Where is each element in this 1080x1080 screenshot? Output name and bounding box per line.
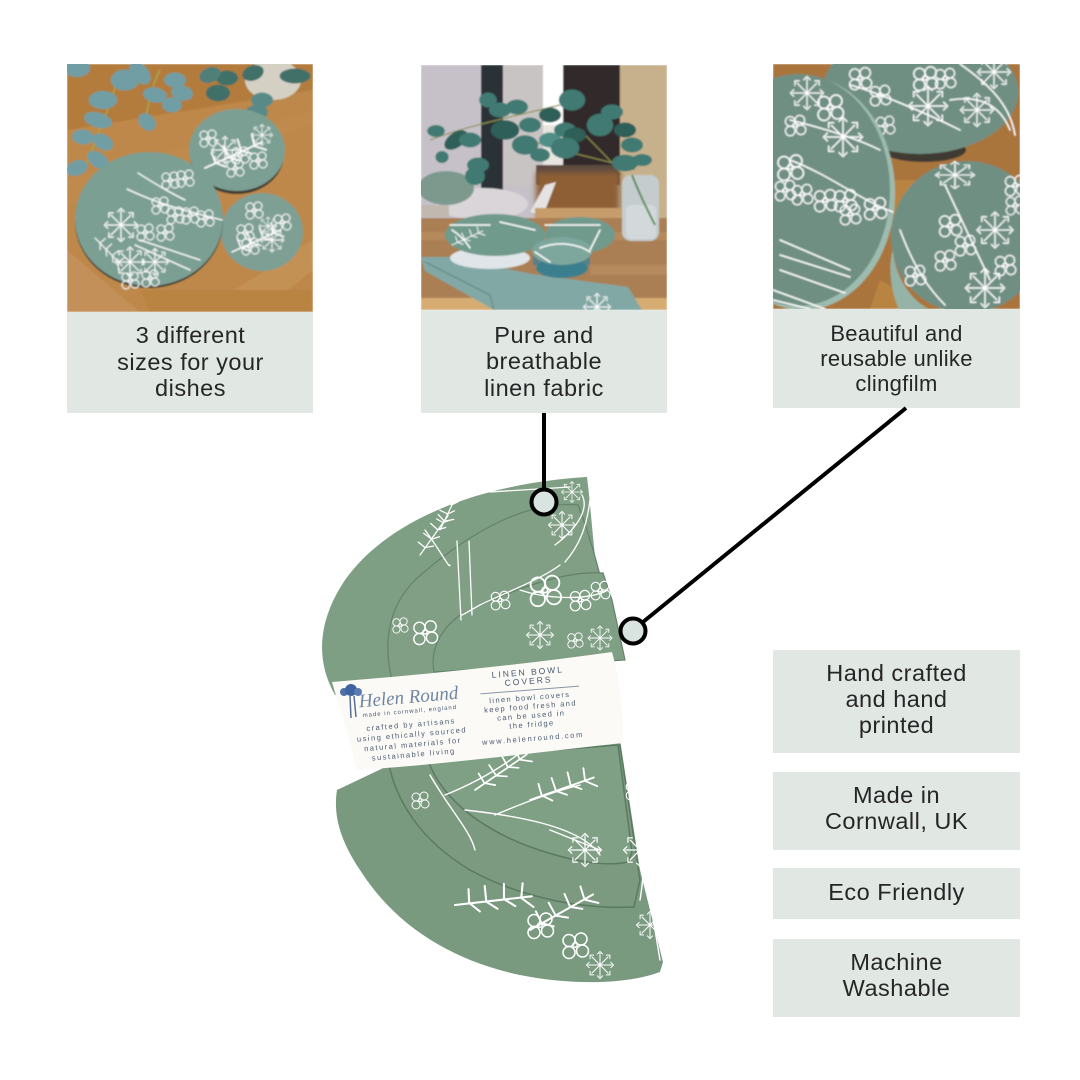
cover: top: [824, 64, 1019, 163]
paper band label: [332, 652, 623, 770]
covered bowls: [450, 247, 530, 269]
eucalyptus sprigs: [64, 58, 310, 179]
caption box: three sizes: 3 different: [136, 322, 245, 348]
eucalyptus bunch: [427, 90, 652, 185]
caption box: linen fabric: [421, 310, 667, 413]
band text: crafted by artisans: crafted by artisans: [366, 716, 456, 733]
band text: linen bowl covers: keep food fresh and: [484, 698, 577, 715]
caption box: three sizes: sizes for your: [117, 349, 264, 375]
feature box: eco friendly: Eco Friendly: [828, 879, 965, 905]
logo: brand name: Helen Round: [357, 683, 460, 712]
band text: linen bowl covers: www.helenround.com: [481, 730, 584, 747]
cover: medium bowl: [189, 109, 285, 194]
cover: right: [889, 160, 1020, 309]
screen print: lower botanical: [412, 745, 664, 978]
band text: crafted by artisans: sustainable living: [371, 746, 456, 763]
band text: linen bowl covers: can be used in: [497, 708, 566, 723]
feature box: eco friendly: [773, 868, 1020, 919]
photo: three covered bowls on a wooden table: [64, 58, 313, 312]
fabric: middle lower layer: [388, 745, 640, 907]
cover: left large: [773, 73, 896, 309]
feature box: made in Cornwall: Cornwall, UK: [825, 808, 968, 834]
photo: bowls on a table with eucalyptus in a jar: [418, 65, 667, 320]
cover: large bowl: [75, 152, 223, 289]
linen cloth: [421, 257, 642, 310]
band text: linen bowl covers: linen bowl covers: [489, 690, 571, 705]
caption box: three sizes: dishes: [155, 375, 226, 401]
caption box: linen fabric: linen fabric: [484, 375, 604, 401]
caption box: three sizes: [67, 312, 313, 413]
panel: reusable: [773, 64, 1020, 408]
feature box: hand crafted: Hand crafted: [826, 660, 967, 686]
panel: linen fabric: [418, 65, 667, 413]
glass jar: [622, 175, 659, 241]
band text: linen bowl covers: the fridge: [509, 718, 555, 731]
product: folded linen bowl covers with paper band: [322, 477, 664, 982]
feature box: made in Cornwall: Made in: [853, 782, 940, 808]
caption box: linen fabric: Pure and: [494, 322, 594, 348]
fabric: middle upper layer: [388, 505, 612, 680]
feature box: machine washable: Washable: [843, 975, 950, 1001]
feature box: machine washable: [773, 939, 1020, 1017]
fabric: top layer: [322, 477, 612, 695]
feature box: hand crafted: and hand: [845, 686, 948, 712]
band text: linen bowl covers: [475, 663, 584, 747]
cover: small bowl: [221, 193, 303, 271]
callout: linen fabric connector: [532, 413, 556, 514]
band text: crafted by artisans: natural materials for: [364, 736, 462, 753]
fabric: bottom layer: [336, 740, 663, 982]
fabric: front lower layer: [428, 745, 632, 864]
fabric: front upper layer: [433, 573, 625, 672]
feature box: hand crafted: [773, 650, 1020, 753]
logo: Helen Round tree: [340, 684, 362, 718]
feature box: hand crafted: printed: [859, 712, 934, 738]
screen print: upper botanical: [393, 482, 612, 650]
panel: three sizes: [64, 58, 313, 413]
paper band label: made in cornwall, england: [362, 705, 457, 719]
photo: close-up of printed covers: [773, 64, 1020, 309]
caption box: reusable: Beautiful and: [830, 321, 963, 346]
caption box: reusable: clingfilm: [855, 371, 938, 396]
callout: reusable connector: [620, 408, 906, 644]
caption box: reusable: [773, 309, 1020, 408]
feature box: machine washable: Machine: [850, 949, 943, 975]
feature box: made in Cornwall: [773, 772, 1020, 850]
caption box: linen fabric: breathable: [486, 348, 602, 374]
band text: crafted by artisans: [356, 715, 469, 764]
caption box: reusable: reusable unlike: [820, 346, 973, 371]
band text: linen bowl covers: COVERS: [504, 674, 553, 688]
band text: linen bowl covers: LINEN BOWL: [491, 664, 564, 680]
band text: crafted by artisans: using ethically sourced: [357, 725, 467, 744]
